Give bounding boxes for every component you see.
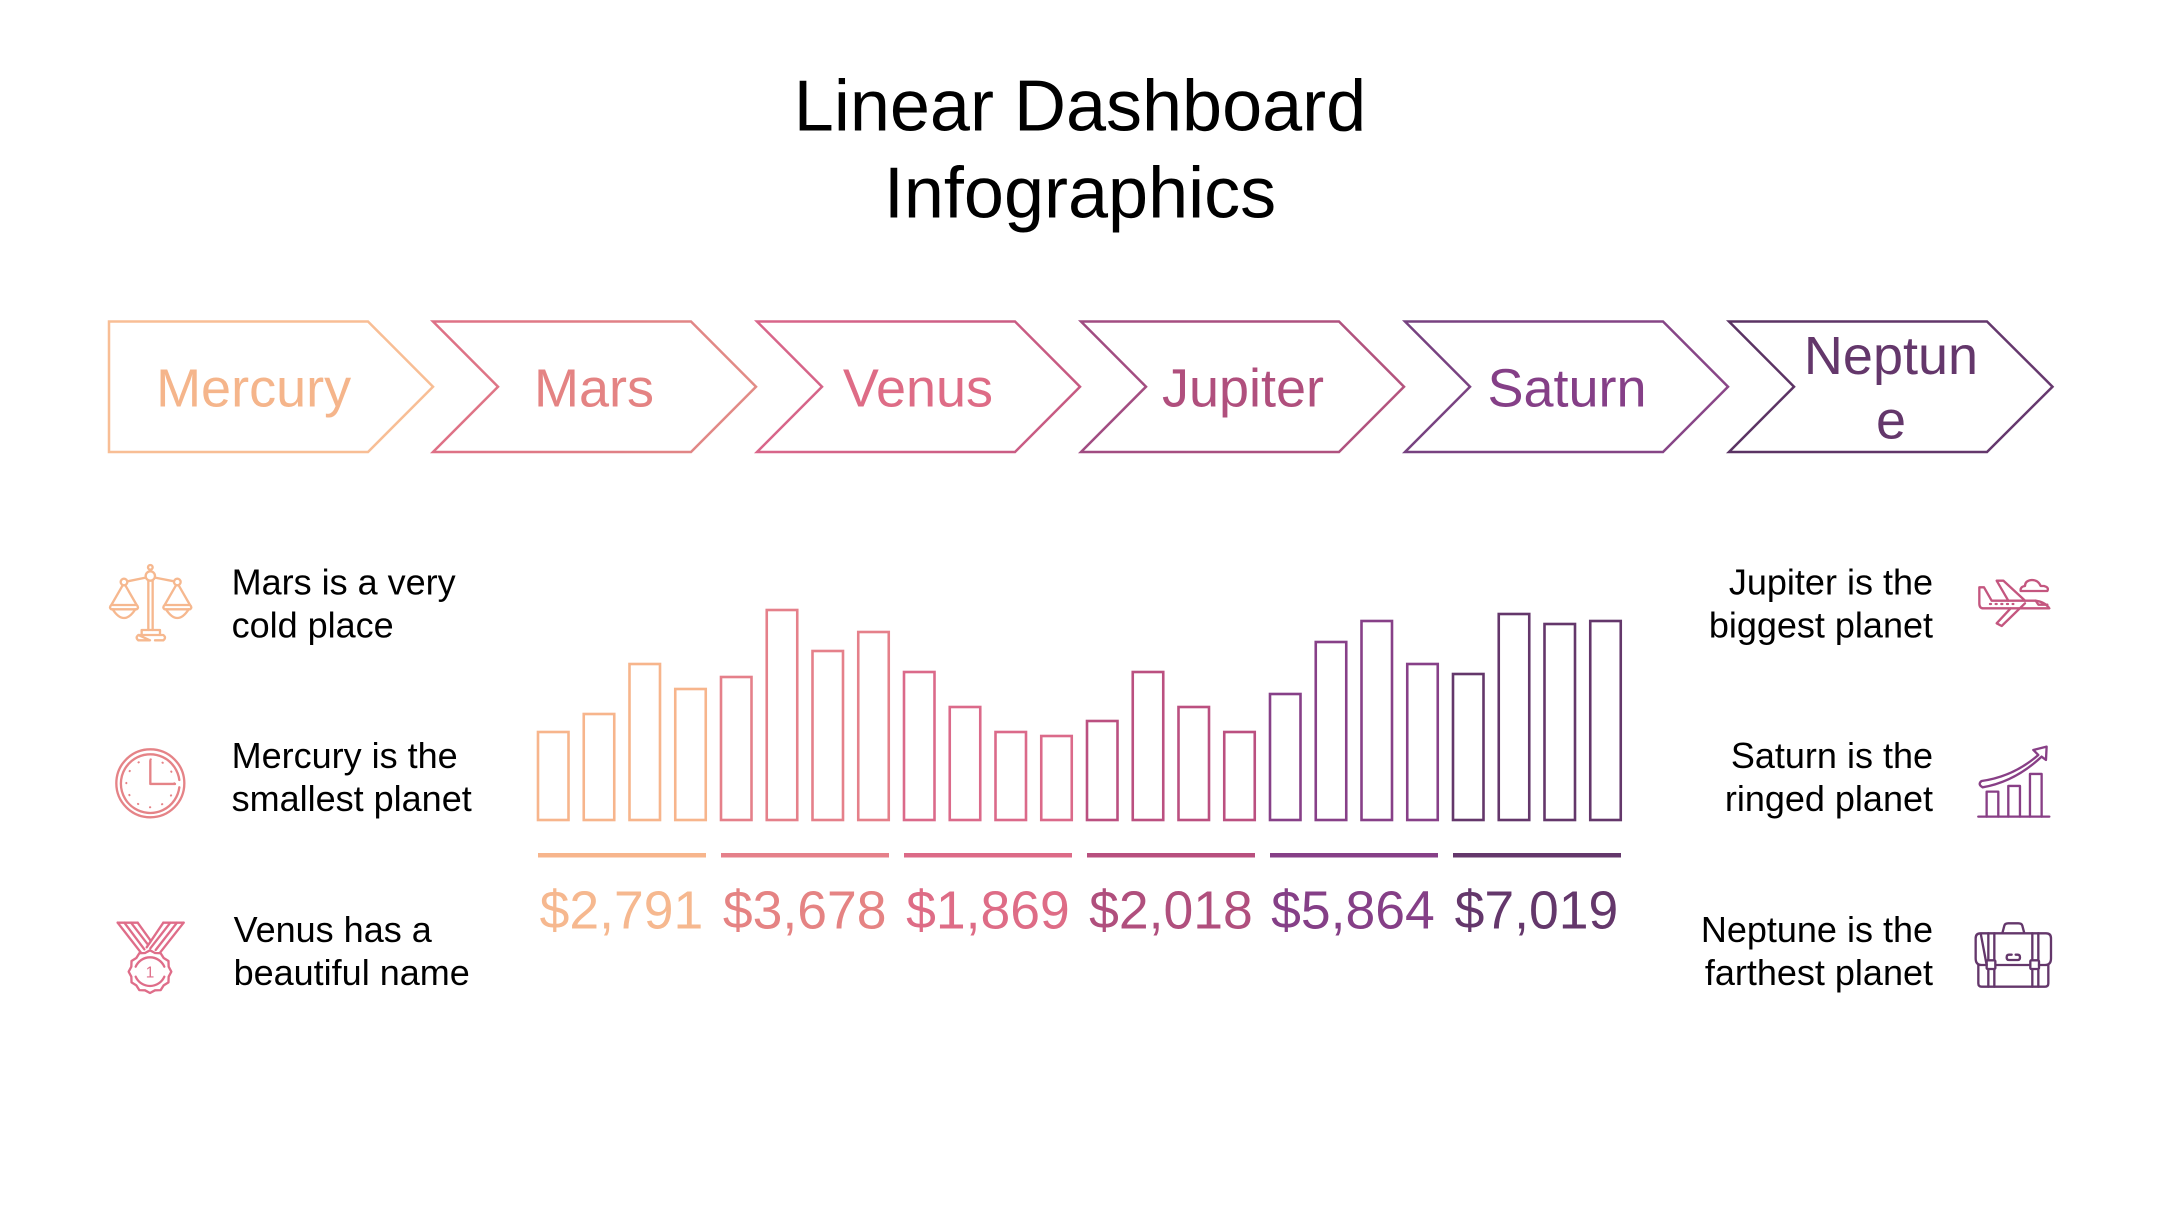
bar chart — [538, 610, 1621, 820]
chevron: Neptune: e — [1876, 390, 1906, 450]
underline and value: Mercury: $2,791 — [540, 882, 703, 940]
bars: Jupiter group — [1087, 672, 1255, 820]
description: Mercury: Mercury is the — [232, 735, 458, 776]
chevron: Venus: Venus — [843, 359, 993, 419]
title: Infographics — [884, 154, 1276, 234]
underline and value: Jupiter: $2,018 — [1089, 882, 1253, 940]
description: Jupiter: biggest planet — [1709, 604, 1933, 646]
underline and value: Saturn — [1270, 853, 1438, 940]
bars: Mars group — [721, 610, 889, 820]
description: Mars: Mars is a very — [232, 562, 456, 602]
underline and value: Jupiter — [1087, 853, 1255, 940]
bars: Mercury group — [538, 664, 706, 820]
chevron: Saturn: Saturn — [1487, 359, 1647, 419]
chevron: Neptune: Neptun — [1804, 326, 1978, 386]
chevron: Jupiter: Jupiter — [1162, 359, 1324, 419]
icon: medal: 1 — [146, 964, 154, 981]
underline and value: Saturn: $5,864 — [1271, 882, 1435, 940]
description: Venus: beautiful name — [234, 952, 470, 993]
underline and value: Mars — [721, 853, 889, 940]
chevron: Venus — [757, 322, 1080, 452]
icon: growth chart — [1978, 747, 2049, 817]
underline and value: Venus — [904, 853, 1072, 940]
title: Linear Dashboard — [794, 66, 1366, 146]
chevron: Mars: Mars — [534, 359, 654, 419]
underline and value: Venus: $1,869 — [906, 882, 1070, 940]
chevron: Mercury — [109, 322, 433, 452]
description: Neptune: farthest planet — [1705, 952, 1933, 993]
description: Neptune: Neptune is the — [1701, 909, 1933, 950]
icon: scales — [110, 565, 191, 640]
chevron: Jupiter — [1081, 322, 1404, 452]
underline and value: Mars: $3,678 — [723, 882, 887, 940]
description: Mars: cold place — [232, 604, 394, 646]
chevron: Mars — [433, 322, 756, 452]
icon: clock — [116, 749, 184, 817]
description: Saturn: Saturn is the — [1731, 735, 1933, 776]
underline and value: Neptune — [1453, 853, 1621, 940]
chevron: Mercury: Mercury — [156, 359, 351, 419]
description: Venus: Venus has a — [234, 909, 432, 950]
chevron: Saturn — [1405, 322, 1728, 452]
description: Saturn: ringed planet — [1725, 778, 1933, 819]
icon: medal — [118, 923, 184, 993]
icon: briefcase — [1976, 923, 2051, 987]
description: Mercury: smallest planet — [232, 778, 472, 819]
title — [794, 66, 1366, 234]
underline and value: Mercury — [538, 853, 706, 940]
bars: Saturn group — [1270, 621, 1438, 820]
bars: Neptune group — [1453, 614, 1621, 820]
bars: Venus group — [904, 672, 1072, 820]
underline and value: Neptune: $7,019 — [1455, 882, 1618, 940]
description: Jupiter: Jupiter is the — [1729, 562, 1933, 602]
icon: airplane — [1979, 580, 2049, 626]
chevron: Neptune — [1729, 322, 2052, 452]
